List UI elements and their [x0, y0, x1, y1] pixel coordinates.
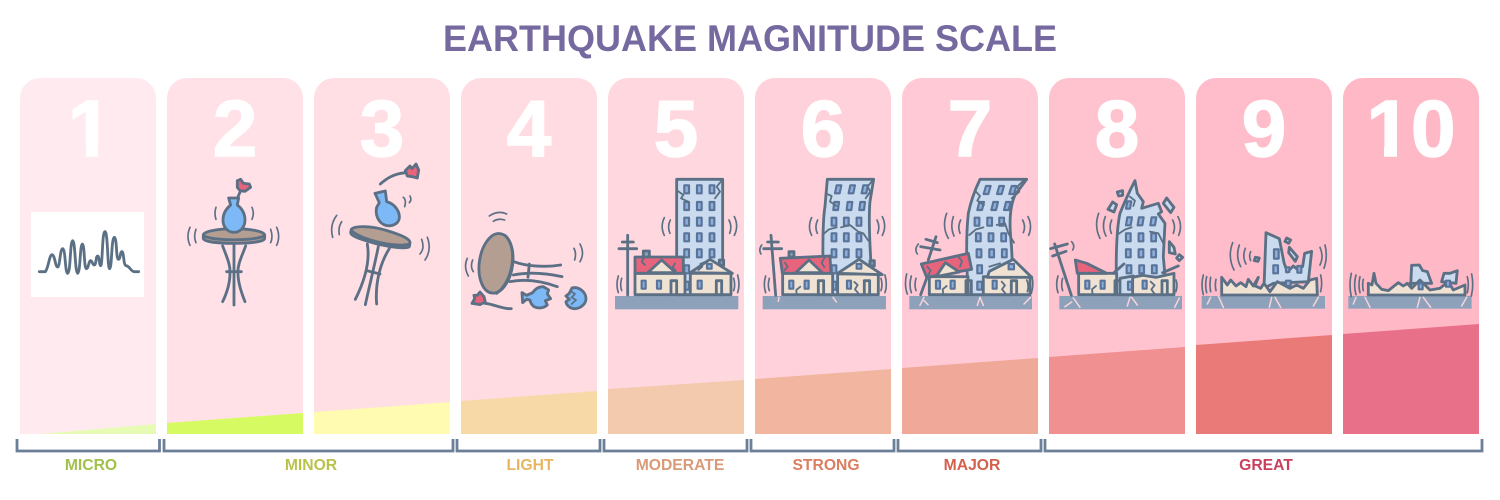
- bracket: major: [898, 439, 1041, 451]
- bracket: minor: [164, 439, 453, 451]
- panel: magnitude 9: [1196, 78, 1332, 434]
- panel: magnitude 1: [20, 78, 156, 434]
- bracket: moderate: [604, 439, 747, 451]
- bracket: light: [457, 439, 600, 451]
- panel: magnitude 10: [1343, 78, 1479, 434]
- label: strong: STRONG: [792, 457, 860, 474]
- icon: seismograph: [31, 212, 144, 297]
- panel: magnitude 8: [1049, 78, 1185, 434]
- label: major: MAJOR: [944, 457, 1000, 474]
- panel: magnitude 6: 6: [801, 84, 845, 173]
- icon: collapsing buildings: [905, 179, 1033, 309]
- panel: magnitude 5: 5: [654, 84, 698, 173]
- panel: magnitude 7: 7: [948, 84, 992, 173]
- panel: magnitude 6: [755, 78, 891, 434]
- panel: magnitude 3: [314, 78, 450, 434]
- panel: magnitude 4: [461, 78, 597, 434]
- panel: magnitude 2: [167, 78, 303, 434]
- panel: magnitude 3: 3: [360, 84, 404, 173]
- panel: magnitude 7: [902, 78, 1038, 434]
- bracket: strong: [751, 439, 894, 451]
- label: moderate: MODERATE: [636, 457, 724, 474]
- icon: tilting table and falling vase: [332, 164, 429, 305]
- icon: table with vase: [188, 179, 279, 305]
- panel: magnitude 4: 4: [507, 84, 552, 173]
- panel: magnitude 8: 8: [1095, 84, 1139, 173]
- label: great: GREAT: [1239, 457, 1293, 474]
- bracket: micro: [17, 439, 160, 451]
- icon: ruined buildings: [1202, 233, 1326, 309]
- panel: magnitude 2: 2: [213, 84, 257, 173]
- title: EARTHQUAKE MAGNITUDE SCALE: [443, 17, 1057, 59]
- panel: magnitude 9: 9: [1242, 84, 1286, 173]
- label: minor: MINOR: [285, 457, 337, 474]
- icon: crumbling buildings: [1051, 181, 1183, 309]
- icon: shaking buildings: [615, 179, 739, 309]
- icon: toppled table and broken vase: [466, 212, 586, 309]
- panel: magnitude 10: 10: [1367, 84, 1455, 173]
- panel: magnitude 1: 1: [68, 84, 112, 173]
- label: light: LIGHT: [506, 457, 554, 474]
- panel: magnitude 5: [608, 78, 744, 434]
- bracket: great: [1045, 439, 1482, 451]
- icon: rubble: [1348, 265, 1473, 309]
- label: micro: MICRO: [65, 457, 117, 474]
- icon: damaged buildings: [760, 179, 886, 309]
